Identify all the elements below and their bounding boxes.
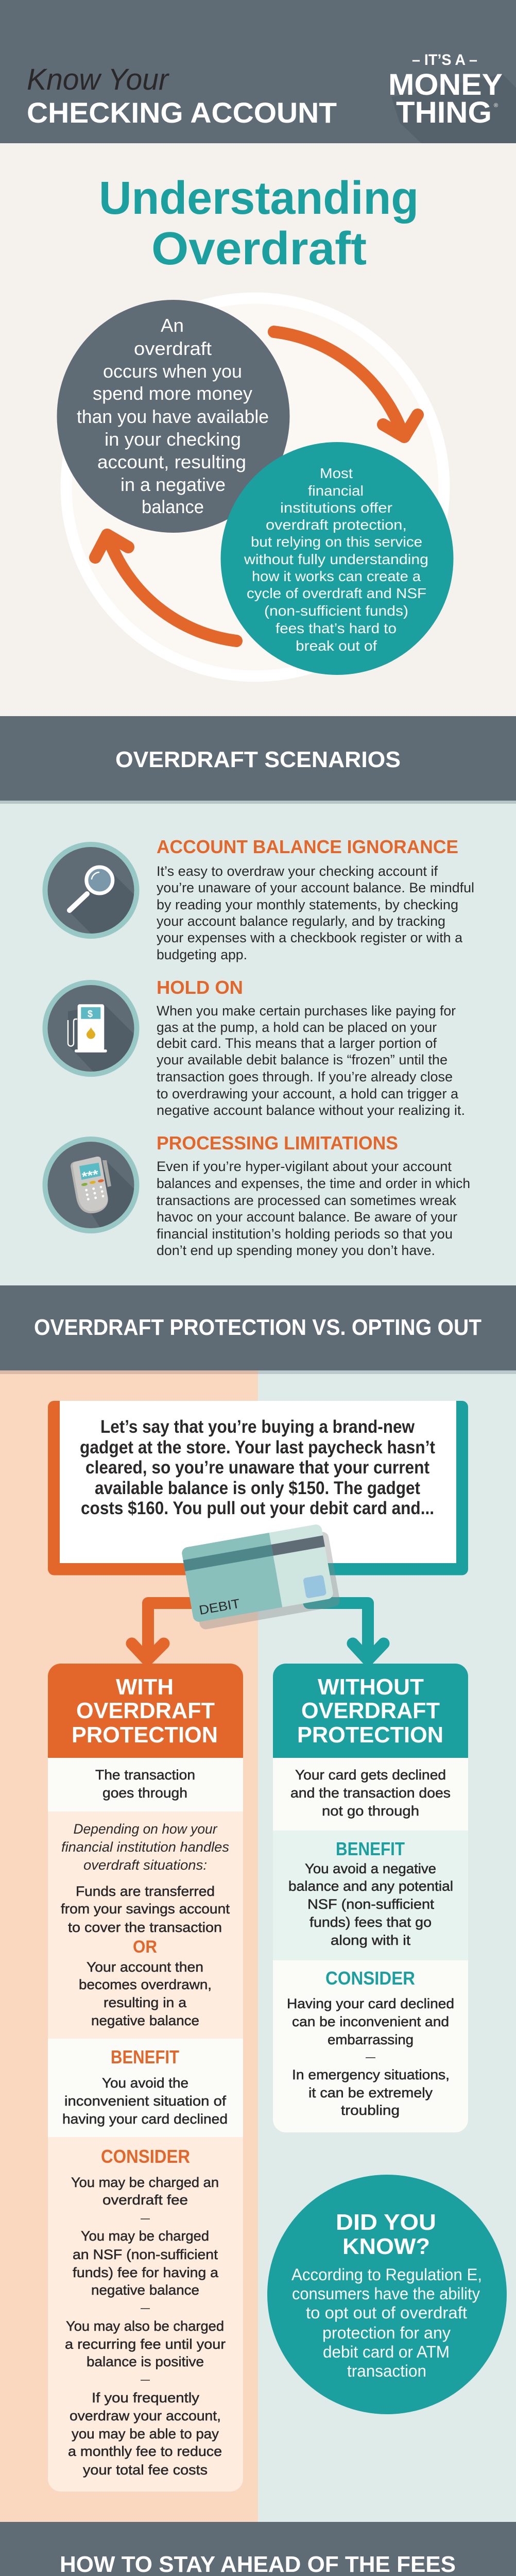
overdraft cycle diagram [57,293,453,682]
title: Checking Account: CHECKING ACCOUNT [27,96,337,129]
consider: it can be extremely [308,2085,433,2100]
scenario text [80,1417,435,1518]
scenario: processing limitations: PROCESSING LIMITATIONS [157,1132,398,1154]
circle: overdraft definition: than you have available [77,406,269,427]
text block: havoc on your account balance. Be aware of your [157,1209,457,1225]
circle: overdraft protection: fees that’s hard to [276,620,397,636]
circle: overdraft protection: cycle of overdraft and NSF [247,585,426,601]
section band: how to stay ahead of the fees [0,2522,516,2576]
scenario: processing limitations [157,1132,470,1258]
outcome [290,1767,451,1819]
consider: a recurring fee until your [65,2336,226,2352]
circle: overdraft definition [57,300,289,533]
icon: gas pump [42,980,142,1082]
callout: did you know: According to Regulation E, [291,2265,482,2284]
options: Funds are transferred [76,1884,215,1899]
heading: Understanding Overdraft [99,173,419,275]
scenario box [48,1401,468,1575]
benefit: BENEFIT [111,2046,179,2067]
logo: It's a Money Thing: MONEY [388,68,503,101]
consider: Having your card declined [287,1996,454,2011]
logo: It's a Money Thing: – IT’S A – [412,52,477,69]
panel heading [297,1674,443,1748]
text block: When you make certain purchases like paying for [157,1003,456,1019]
panel heading: OVERDRAFT [301,1698,440,1723]
text block: to overdrawing your account, a hold can trigger a [157,1086,459,1101]
callout: did you know: consumers have the ability [292,2284,480,2303]
consider [65,2146,226,2478]
circle: overdraft protection [220,442,453,675]
scenario text: cleared, so you’re unaware that your current [85,1458,429,1478]
benefit: BENEFIT [336,1838,405,1859]
circle: overdraft definition: balance [142,496,204,517]
scenario text: gadget at the store. Your last paycheck hasn’t [80,1437,435,1458]
callout: did you know: KNOW? [342,2234,430,2259]
panel: without overdraft protection [273,1664,468,2132]
text block: your expenses with a checkbook register or with a [157,930,463,945]
scenario: account balance ignorance: ACCOUNT BALANCE IGNORANCE [157,836,458,857]
section band: overdraft scenarios [0,716,516,804]
section band: protection vs opting out [0,1285,516,1374]
arrow: overdraft to protection [274,332,418,437]
note: overdraft situations: [83,1857,207,1873]
text block: you’re unaware of your account balance. Be mindful [157,880,474,895]
benefit: having your card declined [62,2111,228,2127]
note: Depending on how your [73,1821,217,1837]
benefit: You avoid a negative [305,1861,436,1876]
outcome [95,1767,195,1801]
circle: overdraft protection: without fully understanding [244,551,428,567]
benefit: balance and any potential [288,1878,453,1894]
text block [157,1159,470,1258]
text block: gas at the pump, a hold can be placed on your [157,1020,437,1035]
consider: embarrassing [328,2032,414,2047]
consider: balance is positive [87,2354,204,2369]
note [61,1821,229,1873]
text block: transaction goes through. If you’re already close [157,1069,453,1084]
text block [157,863,474,962]
consider: negative balance [91,2282,199,2298]
icon: magnifying glass [42,842,139,939]
circle: overdraft definition: in your checking [105,429,241,450]
circle: overdraft protection: how it works can create a [252,568,421,584]
circle: overdraft protection: but relying on this service [251,534,422,550]
heading: Understanding Overdraft: Understanding [99,173,419,224]
heading: Understanding Overdraft: Overdraft [151,223,367,275]
icon: debit card [181,1523,341,1630]
options [61,1884,230,2028]
benefit [288,1838,453,1948]
text block: debit card. This means that a larger portion of [157,1036,437,1051]
consider: an NSF (non-sufficient [73,2247,218,2262]
circle: overdraft definition: spend more money [93,383,252,404]
consider: troubling [341,2103,400,2118]
consider: CONSIDER [101,2146,190,2167]
options: becomes overdrawn, [79,1977,212,1992]
arrow: fees back to overdraft [95,535,236,641]
callout: did you know [267,2175,507,2414]
circle: overdraft definition: An [161,315,184,336]
logo: It's a Money Thing [388,52,503,129]
text block: transactions are processed can sometimes wreak [157,1193,456,1208]
circle: overdraft protection: Most [320,465,353,481]
scenario: account balance ignorance [157,836,474,962]
section band: overdraft scenarios: OVERDRAFT SCENARIOS [115,747,401,772]
arrow: to without overdraft protection [309,1603,384,1660]
options: from your savings account [61,1901,230,1917]
header band [0,0,516,143]
options: negative balance [91,2013,199,2028]
consider: You may also be charged [66,2318,224,2334]
icon: card terminal [42,1137,139,1233]
scenario text: costs $160. You pull out your debit card and... [81,1498,434,1518]
text block: your account balance regularly, and by tracking [157,913,445,929]
consider: you may be able to pay [72,2426,219,2442]
logo: It's a Money Thing: THING [396,96,492,129]
circle: overdraft protection: break out of [296,638,377,654]
circle: overdraft definition: overdraft [134,338,212,359]
icon: debit card: DEBIT [198,1597,241,1618]
options: resulting in a [104,1995,187,2010]
callout: did you know: DID YOU [336,2210,436,2235]
consider: funds) fee for having a [73,2265,219,2280]
text block [157,1003,465,1118]
benefit: inconvenient situation of [64,2093,227,2109]
outcome: and the transaction does [290,1785,451,1801]
outcome: goes through [102,1785,187,1801]
circle: overdraft definition: occurs when you [103,361,242,382]
label: or: OR [133,1937,157,1957]
text block: budgeting app. [157,947,247,962]
callout: did you know: to opt out of overdraft [306,2303,467,2322]
text block: your available debit balance is “frozen” until the [157,1052,448,1067]
consider: your total fee costs [83,2462,208,2478]
consider: In emergency situations, [292,2067,450,2082]
options: to cover the transaction [68,1920,222,1935]
benefit: NSF (non-sufficient [307,1896,435,1912]
logo: It's a Money Thing: ® [494,103,498,109]
panel: comparison background [0,1374,516,2522]
scenario: hold on: HOLD ON [157,977,243,998]
panel heading [72,1674,218,1748]
benefit [62,2046,228,2127]
consider: You may be charged [81,2228,209,2244]
callout: did you know: protection for any [322,2324,451,2342]
circle: overdraft definition: in a negative [121,474,226,495]
panel heading: PROTECTION [297,1722,443,1748]
scenario text: Let’s say that you’re buying a brand-new [100,1417,415,1437]
callout: did you know: transaction [347,2362,426,2380]
options: Your account then [87,1959,203,1975]
scenario text: available balance is only $150. The gadget [95,1478,420,1498]
panel: scenarios background [0,804,516,1285]
consider: a monthly fee to reduce [68,2444,222,2459]
consider: overdraft fee [102,2192,188,2208]
consider: You may be charged an [71,2175,219,2190]
text block: don’t end up spending money you don’t have. [157,1243,435,1258]
benefit: You avoid the [102,2075,188,2091]
callout: did you know: debit card or ATM [323,2343,450,2361]
title: Know Your: Know Your [27,63,170,96]
benefit: funds) fees that go [309,1914,432,1930]
panel heading: PROTECTION [72,1722,218,1748]
consider: CONSIDER [325,1968,415,1989]
text block: by reading your monthly statements, by checking [157,897,458,912]
text block: balances and expenses, the time and order in which [157,1176,470,1191]
section band: protection vs opting out: OVERDRAFT PROTECTION VS. OPTING OUT [34,1315,481,1340]
text block: It’s easy to overdraw your checking account if [157,863,438,879]
icon: card terminal: *** [81,1167,100,1184]
scenario: hold on [157,977,465,1118]
circle: overdraft protection: institutions offer [280,500,392,516]
consider [287,1968,454,2118]
outcome: The transaction [95,1767,195,1783]
icon: gas pump: $ [88,1009,93,1019]
panel heading: OVERDRAFT [76,1698,215,1723]
outcome: not go through [322,1803,419,1819]
panel heading: WITH [116,1674,174,1700]
consider: can be inconvenient and [292,2014,449,2029]
outcome: Your card gets declined [295,1767,446,1783]
consider: overdraw your account, [70,2408,221,2424]
circle: overdraft protection: financial [308,483,364,499]
consider: If you frequently [92,2390,200,2405]
panel heading: WITHOUT [318,1674,424,1700]
note: financial institution handles [61,1839,229,1855]
benefit: along with it [331,1933,411,1948]
circle: overdraft protection: (non-sufficient funds) [264,603,408,619]
text block: Even if you’re hyper-vigilant about your account [157,1159,452,1174]
arrow: to with overdraft protection [132,1603,206,1660]
text block: negative account balance without your realizing it. [157,1103,465,1118]
circle: overdraft definition: account, resulting [97,451,246,472]
text block: financial institution’s holding periods so that you [157,1226,453,1242]
panel: with overdraft protection [48,1664,243,2492]
circle: overdraft protection: overdraft protection, [266,517,407,533]
